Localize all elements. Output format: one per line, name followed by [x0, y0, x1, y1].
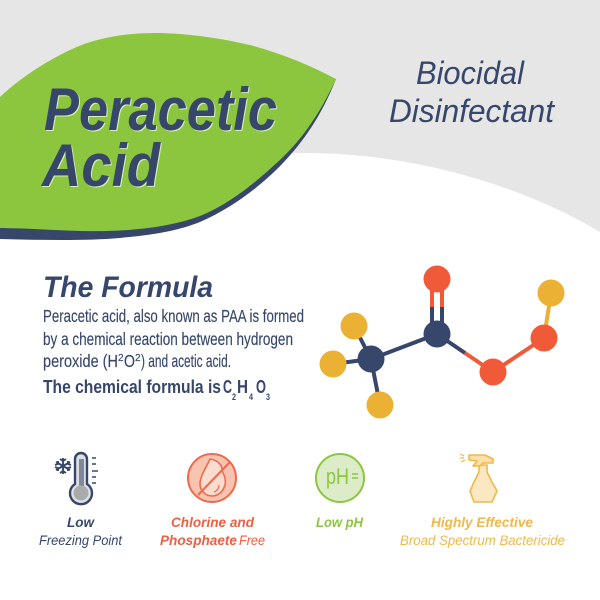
leaf banner: [0, 33, 336, 240]
title: Peracetic Acid: Acid: [41, 133, 162, 200]
label: Chlorine and Phosphate Free: Phosphaete: [160, 533, 237, 548]
label: Highly Effective Broad Spectrum Bactericide: Highly Effective: [431, 515, 533, 530]
icon: no water drop: [188, 454, 236, 502]
formula description text: O: [124, 351, 135, 371]
icon: pH circle: [316, 454, 364, 502]
formula description text: 2: [135, 353, 141, 364]
chemical formula line: 4: [249, 392, 253, 402]
title: Peracetic Acid: Acid: [40, 132, 161, 199]
formula description text: [43, 306, 304, 371]
chemical formula line: 2: [232, 392, 236, 402]
heading: The Formula: The Formula: [43, 271, 213, 304]
label: Chlorine and Phosphate Free: [160, 515, 265, 548]
subtitle: Biocidal Disinfectant: Biocidal: [416, 55, 525, 91]
chemical formula line: O: [256, 377, 266, 397]
grey header background: [0, 0, 600, 232]
icon: thermometer with snowflake: [55, 453, 98, 504]
formula description text: peroxide (H: [43, 351, 118, 371]
subtitle: Biocidal Disinfectant: [389, 55, 555, 129]
formula description text: ) and acetic acid.: [141, 351, 231, 371]
label: Chlorine and Phosphate Free: Free: [239, 533, 265, 548]
label: Low Freezing Point: Low: [67, 515, 95, 530]
formula description text: 2: [118, 353, 124, 364]
label: Low pH: Low pH: [316, 515, 363, 530]
formula description text: Peracetic acid, also known as PAA is formed: [43, 306, 304, 326]
icon: pH circle: pH: [326, 464, 349, 489]
subtitle: Biocidal Disinfectant: Disinfectant: [389, 93, 555, 129]
chemical formula line: H: [237, 377, 248, 397]
formula description text: by a chemical reaction between hydrogen: [43, 329, 293, 349]
label: Highly Effective Broad Spectrum Bactericide: Broad Spectrum Bactericide: [400, 533, 565, 548]
icon: spray bottle: [460, 454, 497, 502]
chemical formula line: C: [223, 377, 232, 397]
label: Chlorine and Phosphate Free: Chlorine and: [171, 515, 255, 530]
title: Peracetic Acid: Peracetic: [45, 77, 278, 144]
chemical formula line: The chemical formula is: [43, 377, 221, 397]
label: Highly Effective Broad Spectrum Bactericide: [400, 515, 565, 548]
molecule diagram: [320, 266, 564, 418]
title: Peracetic Acid: [40, 76, 278, 200]
chemical formula line: 3: [266, 392, 270, 402]
label: Low Freezing Point: [39, 515, 123, 548]
label: Low Freezing Point: Freezing Point: [39, 533, 123, 548]
title: Peracetic Acid: Peracetic: [44, 76, 277, 143]
